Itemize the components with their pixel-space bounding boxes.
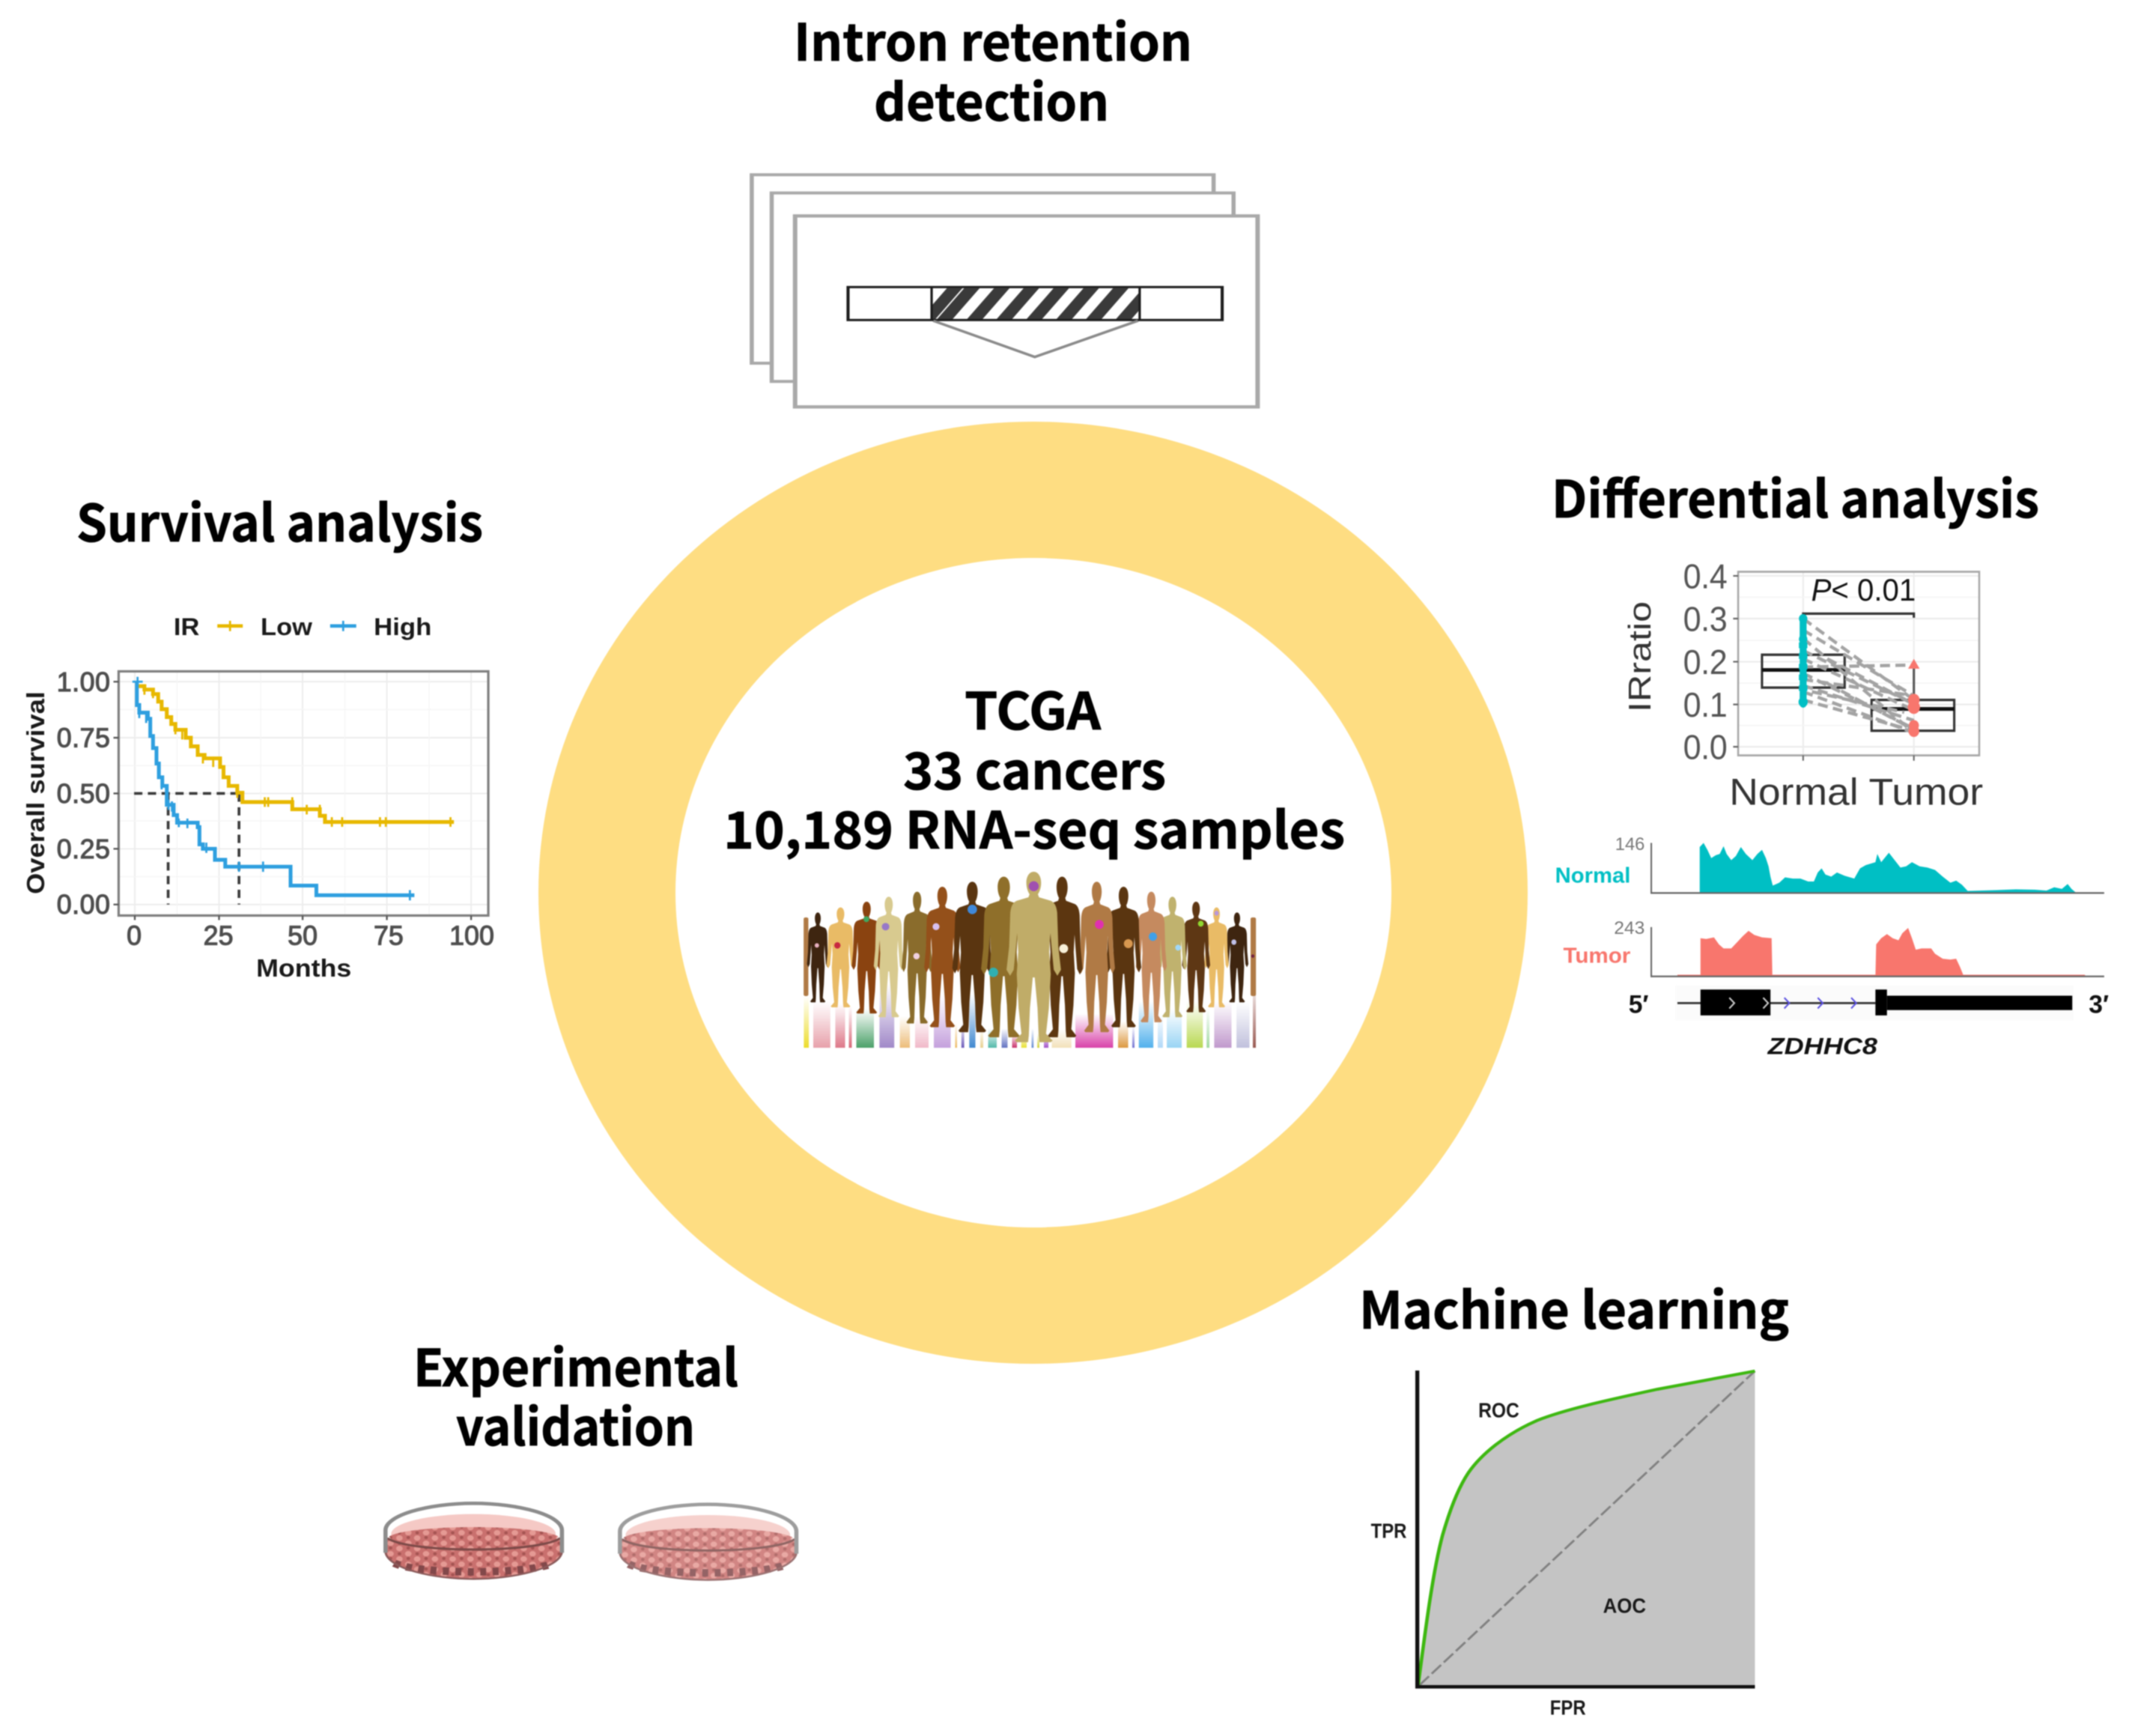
axis titles: Months: [256, 955, 351, 983]
chart: Kaplan-Meier survival curves: [22, 613, 494, 983]
axis labels: Normal Tumor: [1729, 771, 1983, 813]
axis and area labels: [1371, 1400, 1646, 1720]
gene model: [1629, 986, 2109, 1060]
axis tick labels: [57, 667, 494, 951]
heading: TCGA dataset summary: 10,189 RNA-seq samples: [723, 789, 1345, 864]
axis tick labels: 0.50: [57, 779, 110, 809]
icon: stacked intron retention cards: [752, 174, 1257, 407]
heading: Survival analysis: Survival analysis: [76, 482, 483, 556]
heading: Experimental validation: [413, 1327, 738, 1460]
central ring: [538, 422, 1528, 1364]
heading: TCGA dataset summary: TCGA: [965, 670, 1101, 744]
heading: Experimental validation: Experimental: [413, 1327, 738, 1401]
axis labels: 0.2: [1683, 644, 1728, 682]
heading: Intron retention detection: [794, 1, 1192, 136]
axis labels: 0.3: [1683, 601, 1728, 639]
icon: cell culture dishes: [386, 1503, 796, 1580]
axis and area labels: ROC: [1478, 1400, 1519, 1422]
heading: Machine learning: Machine learning: [1359, 1269, 1789, 1344]
legend: Low: [261, 613, 313, 640]
legend: IR: [174, 613, 199, 640]
gene model: 3′: [2089, 990, 2109, 1019]
heading: Differential analysis: Differential analysis: [1552, 458, 2039, 532]
chart: ZDHHC8 read coverage tracks: [1555, 834, 2109, 1060]
gene model: 5′: [1629, 990, 1649, 1019]
normal track: Normal: [1555, 864, 1630, 887]
chart: IR ratio paired box plot: [1623, 558, 1983, 813]
heading: Intron retention detection: detection: [874, 61, 1109, 136]
axis labels: IRratio: [1623, 601, 1658, 712]
heading: Experimental validation: validation: [456, 1386, 695, 1460]
axis tick labels: 0.25: [57, 834, 110, 864]
tumor track: Tumor: [1563, 944, 1631, 968]
silhouettes: [804, 872, 1256, 1042]
axis and area labels: TPR: [1371, 1520, 1407, 1543]
heading: TCGA dataset summary: 33 cancers: [903, 730, 1166, 804]
normal track: [1555, 834, 2104, 893]
colored bars: [803, 989, 1257, 1048]
axis titles: Overall survival: [22, 691, 50, 894]
tumor track: [1563, 918, 2104, 977]
chart: ROC curve: [1371, 1371, 1755, 1720]
heading: TCGA dataset summary: [723, 670, 1345, 864]
organ dots: [815, 881, 1254, 977]
axis and area labels: AOC: [1603, 1594, 1646, 1618]
axis tick labels: 25: [204, 921, 234, 951]
axis labels: [1623, 558, 1983, 813]
axis tick labels: 1.00: [57, 667, 110, 697]
axis tick labels: 0: [127, 921, 142, 951]
significance label: P< 0.01: [1811, 572, 1916, 607]
axis tick labels: 0.75: [57, 723, 110, 753]
tumor track: 243: [1614, 918, 1645, 938]
axis and area labels: FPR: [1550, 1696, 1586, 1720]
axis labels: 0.1: [1683, 687, 1728, 724]
heading: Intron retention detection: Intron retention: [794, 1, 1192, 76]
axis labels: 0.4: [1683, 558, 1728, 596]
axis tick labels: 75: [374, 921, 404, 951]
legend: High: [374, 613, 431, 640]
axis titles: [22, 691, 351, 983]
normal track: 146: [1615, 834, 1645, 854]
icon: crowd of human silhouettes with organ dots: [804, 872, 1256, 1048]
axis tick labels: 100: [449, 921, 494, 951]
legend: [174, 613, 431, 640]
axis tick labels: 50: [288, 921, 318, 951]
gene model: ZDHHC8: [1767, 1032, 1878, 1060]
axis labels: 0.0: [1683, 729, 1728, 767]
axis tick labels: 0.00: [57, 890, 110, 920]
